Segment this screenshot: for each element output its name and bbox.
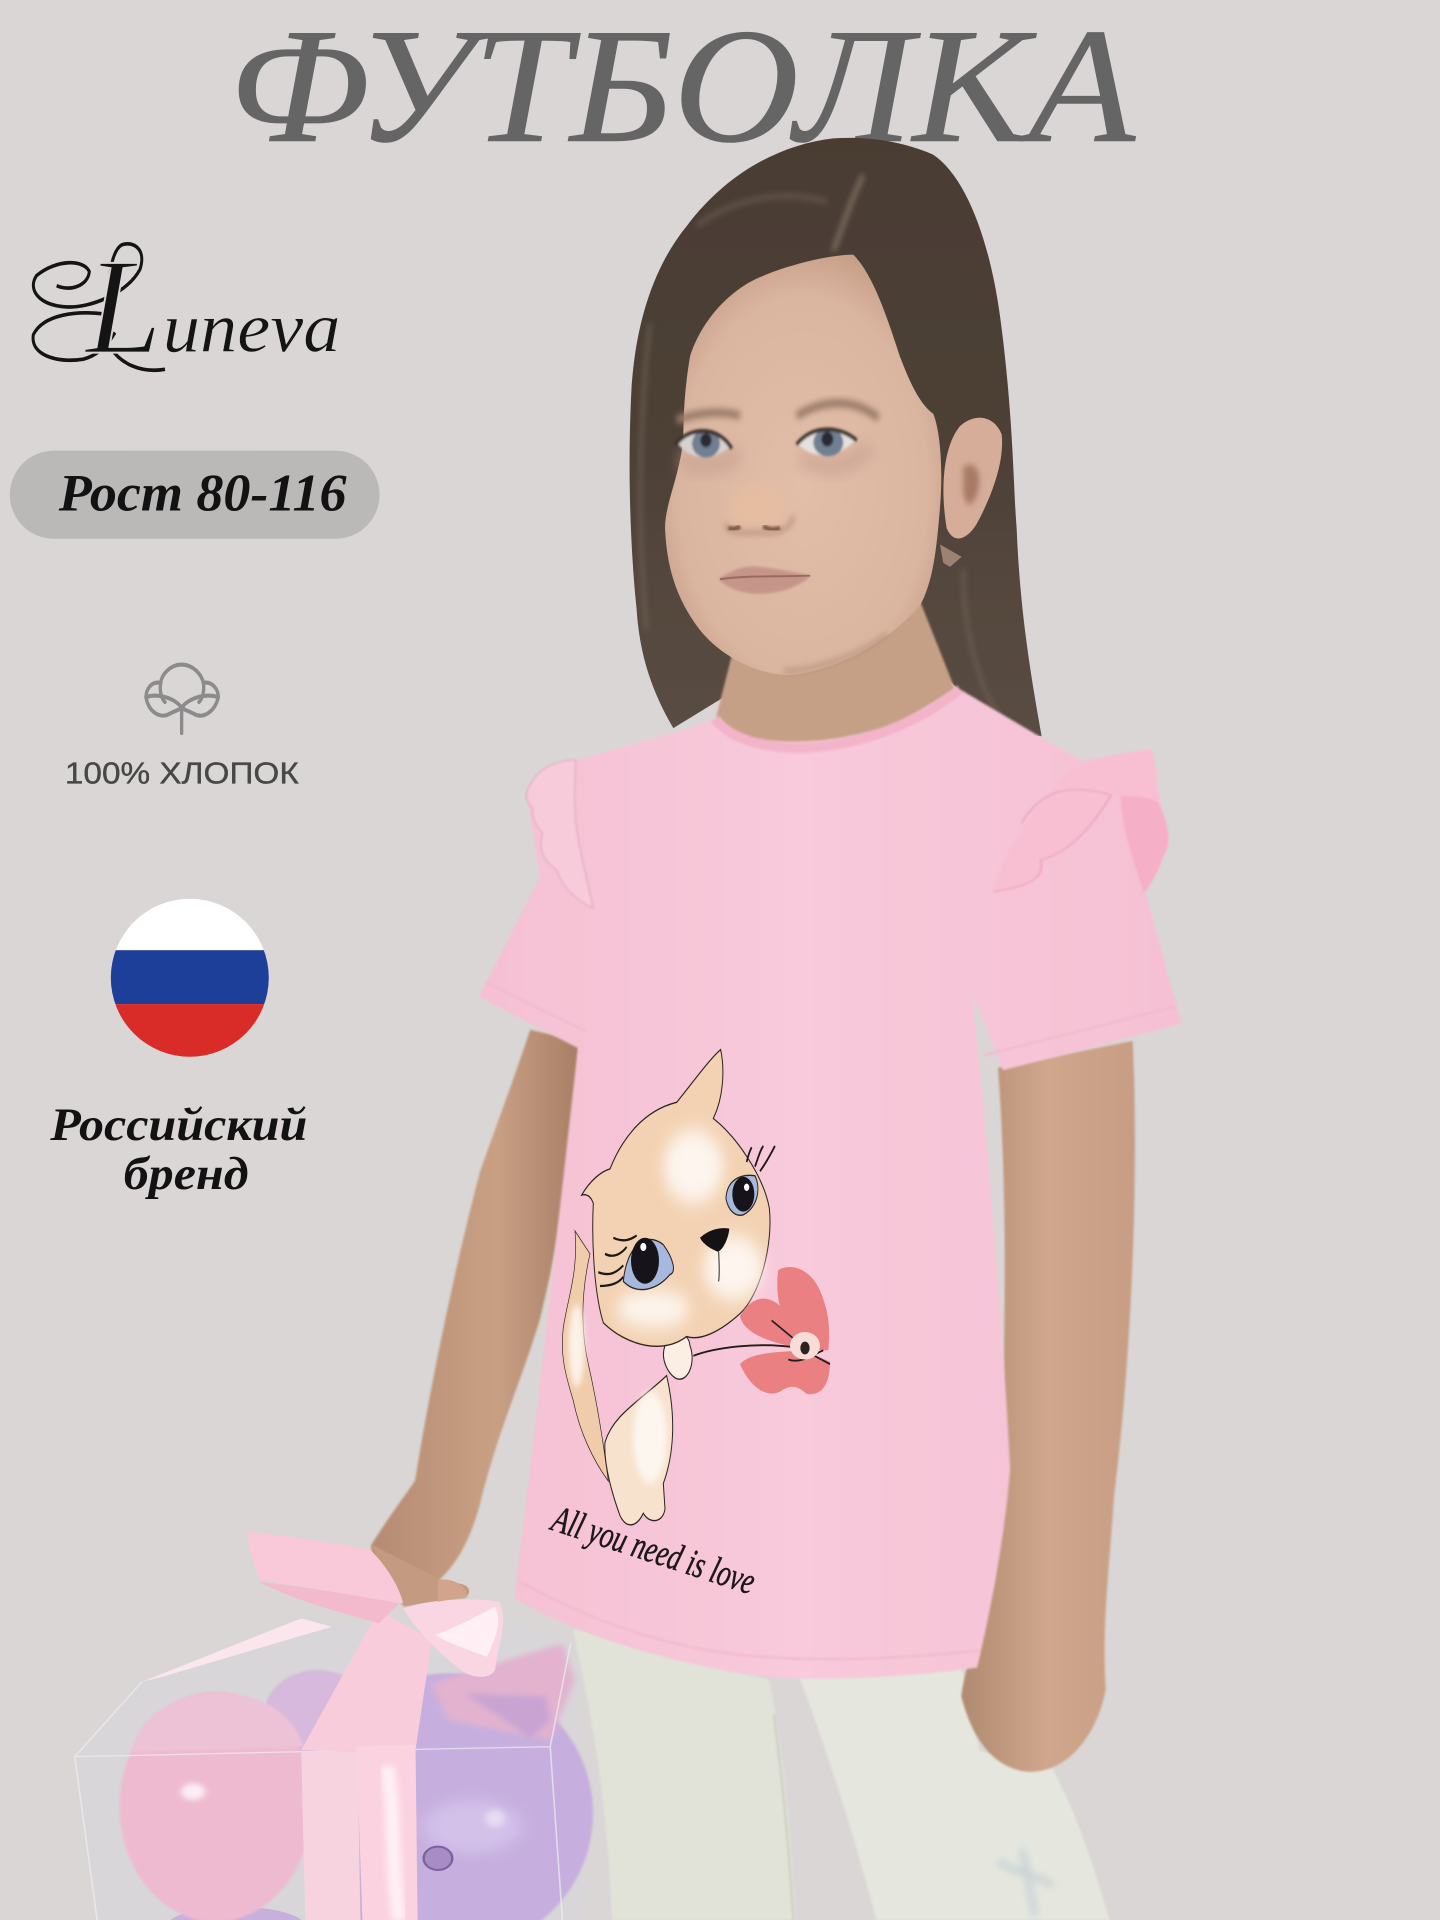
hand over box <box>373 1545 469 1605</box>
gift box with balloons <box>75 1532 593 1920</box>
title: ФУТБОЛКА <box>229 0 1136 177</box>
brand logo: Luneva: uneva <box>163 289 340 367</box>
head <box>582 1050 770 1346</box>
label: russian brand: Российский <box>49 1100 307 1151</box>
icon: cotton boll <box>146 665 218 733</box>
height badge <box>10 451 380 539</box>
left eye of kitten <box>598 1236 673 1290</box>
mouth <box>718 566 812 594</box>
trousers <box>573 1629 1109 1920</box>
nose <box>728 485 785 530</box>
inner tissue <box>432 1643 575 1740</box>
ribbon vertical <box>301 1610 432 1752</box>
left eye <box>675 430 732 458</box>
right eye of kitten <box>726 1146 775 1215</box>
hair <box>630 138 1042 736</box>
left arm <box>371 1030 579 1607</box>
body <box>605 1376 673 1525</box>
lower purple balloon <box>167 1907 305 1920</box>
t-shirt print: kitten with flower <box>562 1050 830 1525</box>
ear <box>943 418 1002 539</box>
neck <box>716 600 955 749</box>
label: russian brand <box>49 1100 307 1200</box>
tail <box>562 1231 608 1481</box>
flower <box>693 1267 830 1394</box>
earring <box>940 544 962 567</box>
left ruffle <box>527 760 593 908</box>
kitten nose <box>700 1228 729 1252</box>
paw <box>663 1335 692 1379</box>
face <box>665 255 1002 675</box>
t-shirt print slogan: All you need is love <box>545 1497 760 1603</box>
purple balloon <box>303 1673 593 1920</box>
glass box back <box>75 1613 591 1920</box>
hem and cuffs <box>485 982 1176 1659</box>
icon: russian flag <box>110 899 269 1058</box>
pink balloon <box>120 1692 311 1920</box>
right eye <box>797 429 857 456</box>
brand logo: Luneva <box>33 231 340 383</box>
collar <box>715 689 960 748</box>
upper purple balloon <box>265 1670 371 1757</box>
box edges <box>75 1643 571 1920</box>
label: 100% cotton: 100% ХЛОПОК <box>65 757 299 791</box>
under-eye shade <box>680 446 870 466</box>
right ruffle <box>993 749 1168 893</box>
right arm <box>961 1041 1135 1772</box>
balloon valve <box>424 1847 452 1870</box>
knot fingers <box>438 1579 467 1602</box>
t-shirt <box>479 689 1182 1679</box>
eyebrows <box>677 403 878 420</box>
label: russian brand: бренд <box>124 1149 249 1200</box>
height badge: Рост 80-116 <box>58 465 347 523</box>
brand logo: Luneva: L <box>84 231 162 383</box>
bow <box>248 1532 503 1677</box>
photo: girl with gift box <box>75 138 1182 1920</box>
